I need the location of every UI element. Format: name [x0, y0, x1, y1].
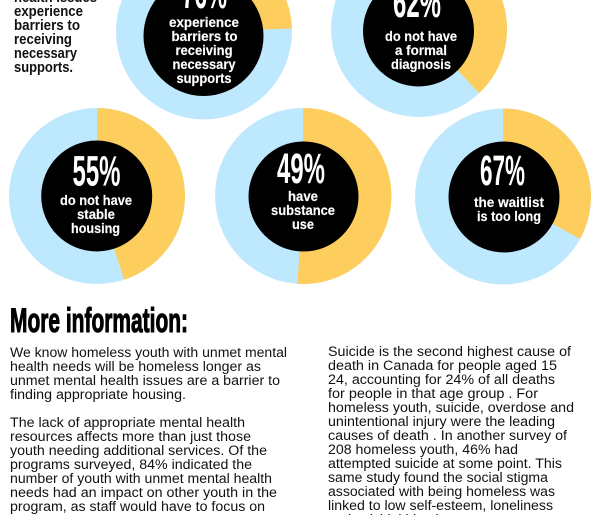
donut chart: 62% no formal diagnosis	[331, 0, 507, 117]
donut chart: 49% substance use	[215, 108, 391, 284]
donut chart: 55% no stable housing: 55%	[72, 148, 120, 196]
donut chart: 62% no formal diagnosis: diagnosis	[391, 56, 451, 72]
donut chart: 67% waitlist too long	[415, 108, 591, 284]
text block: left column: resources affects more than just those	[10, 429, 251, 445]
text block: left column: We know homeless youth with unmet mental	[10, 345, 287, 361]
donut chart: 49% substance use: substance	[271, 202, 335, 218]
text block: left column: finding appropriate housing.	[10, 387, 186, 403]
donut chart: 67% waitlist too long: is too long	[477, 208, 541, 224]
text block: right column: linked to low self-esteem, loneliness	[328, 498, 553, 514]
text block: left column: number of youth with unmet mental health	[10, 471, 272, 487]
donut chart: 49% substance use: 49%	[277, 145, 325, 193]
donut chart: 76% experience barriers: experience	[169, 14, 239, 30]
donut chart: 55% no stable housing: housing	[71, 220, 120, 236]
text block: left column: health needs will be homeless longer as	[10, 359, 261, 375]
donut chart: 55% no stable housing: do not have	[60, 192, 132, 208]
text block: right column: causes of death . In another survey of	[328, 428, 567, 444]
text block: left column: program, as staff would have to focus on	[10, 499, 265, 515]
donut chart: 55% no stable housing: stable	[77, 206, 115, 222]
donut chart: 76% experience barriers: receiving	[176, 42, 232, 58]
text block: left column: needs had an impact on other youth in the	[10, 485, 277, 501]
text block: right column: unintentional injury were the leading	[328, 414, 555, 430]
text block: left column: youth needing additional services. Of the	[10, 443, 267, 459]
donut chart: 76% experience barriers: barriers to	[172, 28, 238, 44]
text block: right column: attempted suicide at some point. This	[328, 456, 562, 472]
text block: left column: The lack of appropriate mental health	[10, 415, 245, 431]
text block: left column: unmet mental health issues are a barrier to	[10, 373, 280, 389]
heading: more information: More information:	[10, 302, 188, 340]
text block: right column: for people in that age group . For	[328, 386, 538, 402]
text block: intro statement: barriers to	[14, 17, 80, 34]
text block: intro statement: supports.	[14, 59, 73, 76]
text block: intro statement: necessary	[14, 45, 78, 62]
text block: right column: associated with being homeless was	[328, 484, 555, 500]
donut chart: 49% substance use: use	[292, 216, 314, 232]
text block: intro statement	[14, 0, 97, 76]
donut chart: 49% substance use: have	[288, 188, 318, 204]
text block: right column: 208 homeless youth, 46% had	[328, 442, 518, 458]
donut chart: 76% experience barriers	[116, 0, 292, 120]
text block: right column: homeless youth, suicide, overdose and	[328, 400, 574, 416]
text block: right column: death in Canada for people aged 15	[328, 358, 557, 374]
text block: right column: 24, accounting for 24% of all deaths	[328, 372, 555, 388]
text block: right column: Suicide is the second highest cause of	[328, 344, 571, 360]
text block: intro statement: receiving	[14, 31, 72, 48]
donut chart: 76% experience barriers: necessary	[172, 56, 236, 72]
donut chart: 67% waitlist too long: 67%	[480, 147, 525, 195]
text block: intro statement: experience	[14, 3, 83, 20]
donut chart: 62% no formal diagnosis: a formal	[395, 42, 447, 58]
donut chart: 62% no formal diagnosis: do not have	[385, 28, 457, 44]
donut chart: 76% experience barriers: supports	[176, 70, 232, 86]
donut chart: 67% waitlist too long: the waitlist	[474, 194, 544, 210]
text block: right column	[328, 344, 574, 515]
donut chart: 55% no stable housing	[9, 108, 185, 284]
text block: right column: same study found the social stigma	[328, 470, 548, 486]
text block: left column: programs surveyed, 84% indicated the	[10, 457, 252, 473]
text block: left column	[10, 345, 287, 515]
